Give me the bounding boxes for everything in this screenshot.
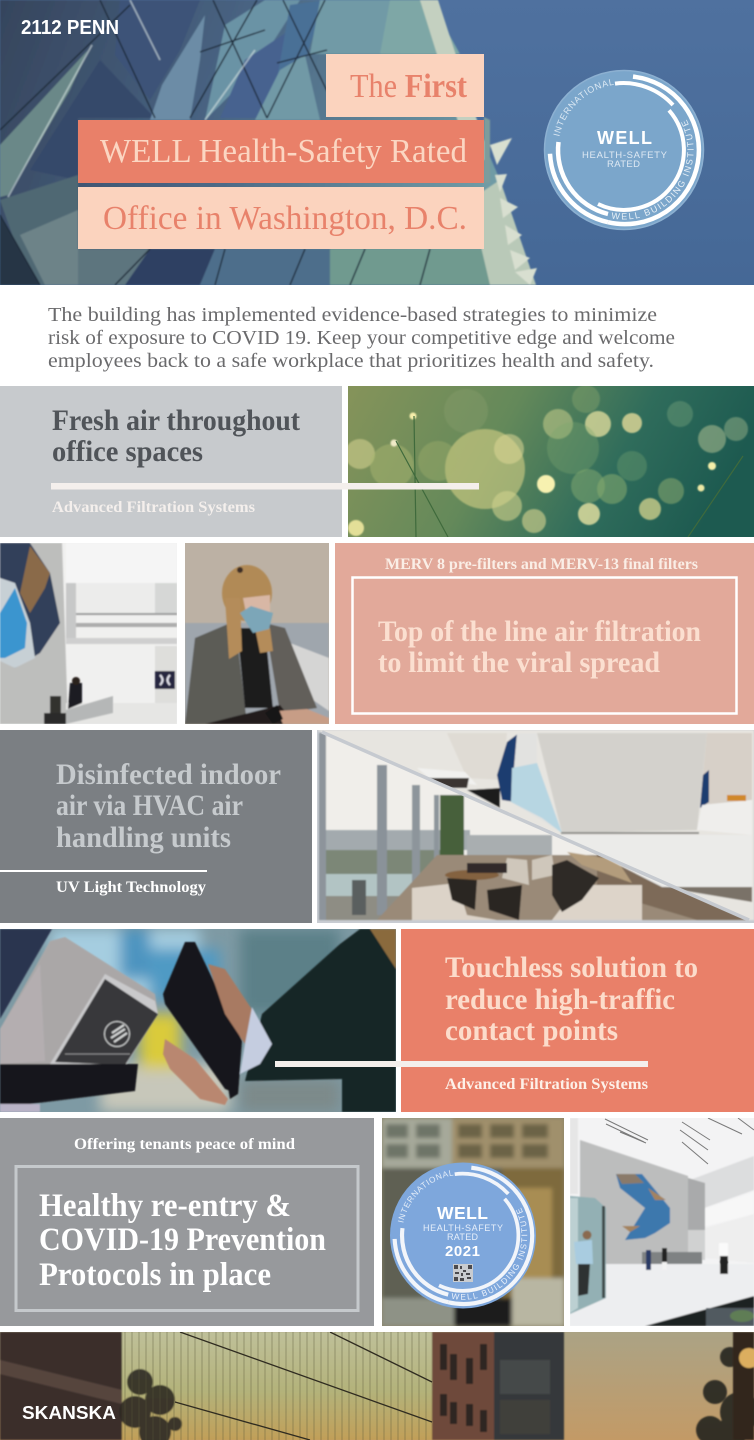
- hero banner: [0, 0, 754, 285]
- badge: WELL 2021 seal: 2021: [445, 1243, 480, 1260]
- divider line: UV: [0, 870, 207, 872]
- badge: WELL 2021 seal: HEALTH-SAFETY: [423, 1223, 503, 1233]
- heading: fresh air: [52, 404, 300, 468]
- heading: touchless solution: reduce high-traffic: [445, 983, 675, 1016]
- heading: disinfected indoor air: air via HVAC air: [56, 789, 243, 822]
- intro paragraph: risk of exposure to COVID 19. Keep your competitive edge and welcome: [48, 327, 675, 349]
- panel: air filtration: [335, 543, 754, 724]
- heading: fresh air: office spaces: [52, 435, 203, 468]
- intro paragraph: The building has implemented evidence-based strategies to minimize: [48, 304, 657, 326]
- photo: phone tapping card reader: [0, 929, 396, 1112]
- subheading: advanced filtration systems: Advanced Filtration Systems: [52, 499, 255, 516]
- badge: WELL 2021 seal: [390, 1162, 536, 1308]
- QR code: [453, 1264, 473, 1282]
- panel: peace of mind: [0, 1118, 374, 1326]
- panel: touchless solution: [401, 929, 754, 1112]
- title box: The First: The First: [350, 68, 468, 105]
- title box: Office in Washington, D.C.: Office in Washington, D.C.: [103, 200, 467, 237]
- badge: WELL Health-Safety Rated seal: HEALTH-SAFETY: [582, 150, 668, 161]
- subheading: MERV filters: MERV 8 pre-filters and MERV-13 final filters: [385, 556, 698, 573]
- badge: WELL 2021 seal: RATED: [447, 1232, 478, 1242]
- badge: WELL Health-Safety Rated seal: WELL: [597, 128, 652, 148]
- heading: top of the line air filtration: to limit the viral spread: [378, 646, 660, 679]
- photo: lobby with blue artwork: [0, 543, 177, 724]
- intro paragraph: employees back to a safe workplace that prioritizes health and safety.: [48, 350, 654, 372]
- heading: healthy re-entry: [39, 1188, 326, 1293]
- brand: Skanska: SKANSKA: [22, 1403, 116, 1423]
- photo: green bokeh: [348, 386, 754, 537]
- subheading: UV light technology: UV Light Technology: [56, 879, 206, 896]
- heading: touchless solution: Touchless solution to: [445, 951, 698, 984]
- panel: fresh air: [0, 386, 342, 537]
- frame: air filtration: [352, 578, 736, 714]
- badge: WELL 2021 seal: INTERNATIONAL: [398, 1170, 454, 1222]
- title box: WELL Health-Safety Rated: WELL Health-Safety Rated: [100, 133, 467, 170]
- intro paragraph: [48, 304, 675, 372]
- heading: healthy re-entry: Healthy re-entry &: [39, 1188, 291, 1224]
- heading: healthy re-entry: COVID-19 Prevention: [39, 1222, 326, 1258]
- frame: re-entry: [16, 1166, 358, 1310]
- badge: WELL Health-Safety Rated seal: RATED: [607, 159, 640, 170]
- title box: The First: [326, 54, 484, 117]
- divider line: fresh air: [51, 483, 479, 490]
- heading: touchless solution: [445, 951, 698, 1047]
- heading: top of the line air filtration: Top of the line air filtration: [378, 615, 701, 648]
- badge: WELL Health-Safety Rated seal: INTERNATIONAL: [553, 79, 614, 136]
- subheading: advanced filtration systems: Advanced Filtration Systems: [445, 1076, 648, 1093]
- subheading: offering tenants peace of mind: Offering tenants peace of mind: [74, 1136, 295, 1153]
- heading: top of the line air filtration: [378, 615, 701, 679]
- hero photo: glass tower against blue sky: [0, 0, 754, 285]
- panel: disinfected indoor air: [0, 730, 312, 923]
- heading: disinfected indoor air: handling units: [56, 821, 231, 854]
- photo: terrace cafe and laptop on desk: [317, 730, 754, 923]
- title box: WELL Health-Safety Rated: [78, 120, 484, 183]
- badge: WELL Health-Safety Rated seal: [544, 70, 704, 230]
- photo: lobby with sculpture: [570, 1118, 754, 1326]
- photo: badge on building window: [382, 1118, 564, 1326]
- heading: disinfected indoor air: [56, 758, 281, 854]
- heading: fresh air: Fresh air throughout: [52, 404, 300, 437]
- badge: WELL 2021 seal: WELL: [437, 1203, 488, 1223]
- badge: WELL 2021 seal: WELL BUILDING INSTITUTE: [452, 1208, 528, 1300]
- photo: woman wearing mask: [185, 543, 329, 724]
- badge: WELL Health-Safety Rated seal: WELL BUILDING INSTITUTE: [612, 120, 694, 220]
- heading: healthy re-entry: Protocols in place: [39, 1257, 271, 1293]
- heading: disinfected indoor air: Disinfected indoor: [56, 758, 281, 791]
- divider line: touchless: [275, 1061, 648, 1067]
- footer photo: building at sunset: [0, 1332, 754, 1440]
- brand: 2112 Penn: 2112 PENN: [21, 17, 119, 39]
- heading: touchless solution: contact points: [445, 1014, 618, 1047]
- title box: Office in Washington, D.C.: [78, 187, 484, 249]
